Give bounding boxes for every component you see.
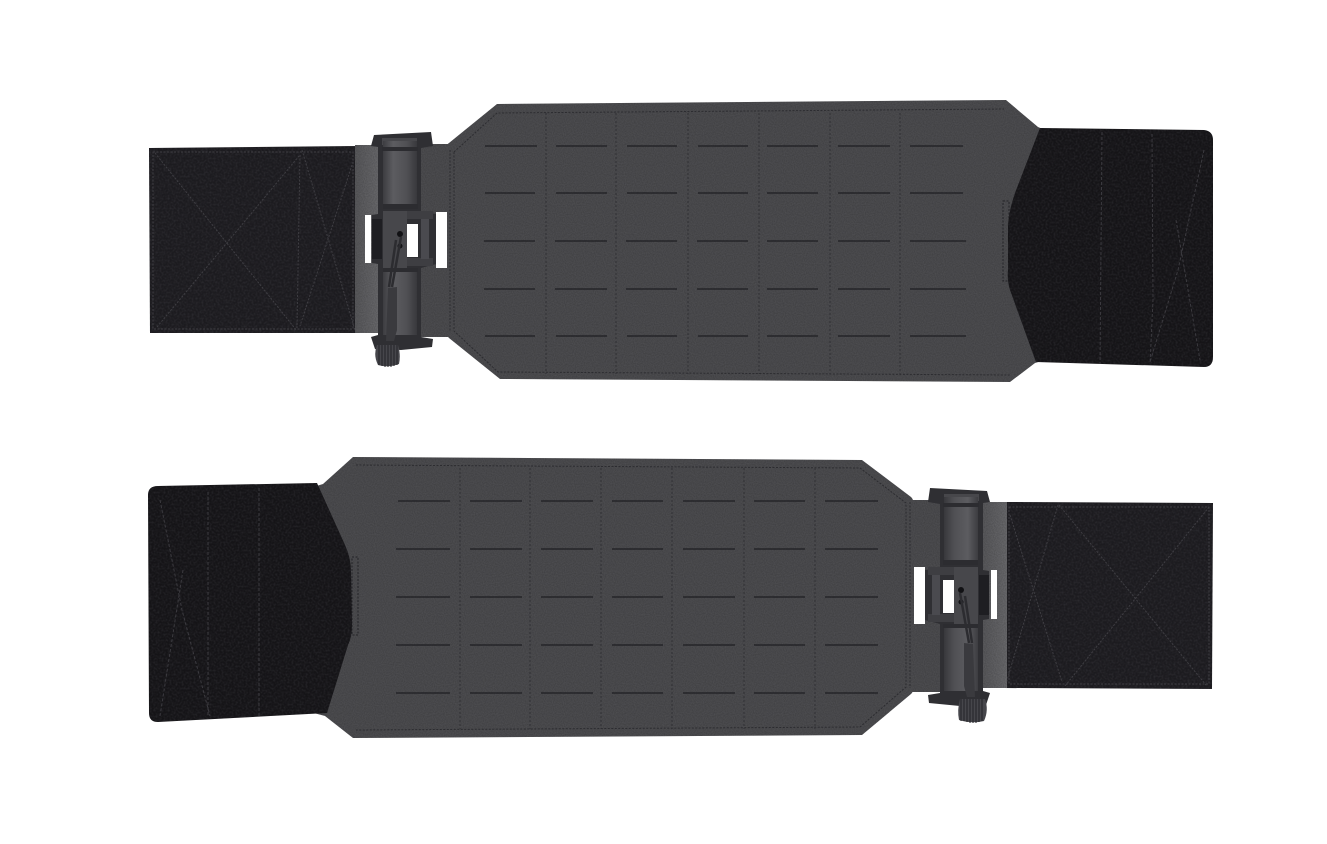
bottom panel edge stitching [356, 465, 910, 730]
bottom right velcro flap [1004, 502, 1213, 689]
top strap slot cut-outs [365, 212, 447, 268]
bottom right strap [982, 502, 1007, 688]
bottom MOLLE panel [310, 457, 913, 738]
bottom cord sleeve [964, 643, 975, 697]
top knob [375, 345, 400, 367]
top left strap [355, 145, 379, 333]
top panel tab stitching [1003, 201, 1009, 281]
bottom knob [958, 699, 987, 723]
bottom panel laser-cut slots [396, 501, 878, 693]
top pull cord [389, 237, 401, 287]
top left velcro flap [149, 146, 358, 333]
top panel edge stitching [450, 109, 1010, 375]
bottom strap slot cut-outs [914, 567, 997, 624]
bottom left velcro flap [148, 483, 352, 722]
bottom buckle [925, 488, 990, 723]
bottom cummerbund [148, 457, 1213, 738]
top MOLLE panel [447, 100, 1045, 382]
top panel laser-cut slots [484, 146, 966, 336]
top panel vertical stitching [546, 113, 900, 374]
bottom panel tab stitching [352, 557, 358, 635]
top right velcro flap [1008, 128, 1213, 367]
top right strap [420, 144, 450, 337]
bottom panel vertical stitching [460, 468, 815, 729]
top cummerbund [149, 100, 1213, 382]
top cord sleeve [386, 287, 397, 341]
top buckle [371, 132, 436, 367]
bottom pull cord [960, 593, 972, 643]
bottom left strap [910, 500, 942, 692]
